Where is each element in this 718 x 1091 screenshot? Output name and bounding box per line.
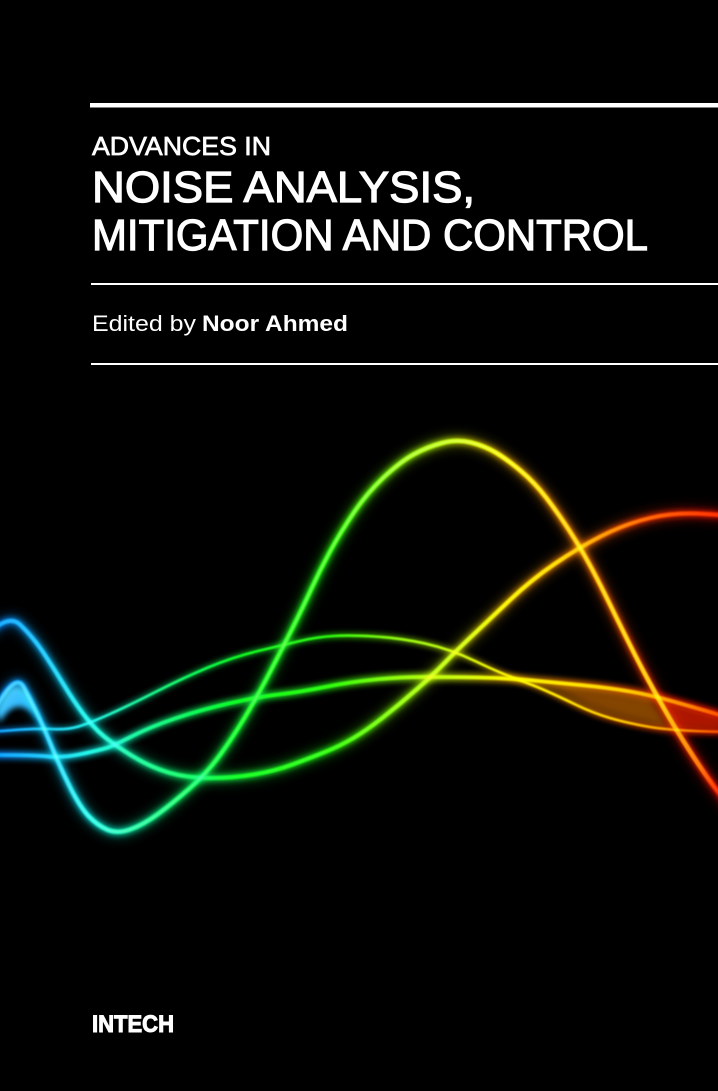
- ambient glow patches: [540, 683, 718, 732]
- rule under title: [91, 283, 718, 285]
- thick top rule: [90, 103, 718, 108]
- blue hump at left edge: [0, 686, 46, 730]
- rule under editor: [91, 363, 718, 365]
- title line two: MITIGATION AND CONTROL: [92, 211, 648, 260]
- edited by: Edited by: [92, 311, 196, 336]
- title line one: NOISE ANALYSIS,: [92, 163, 475, 212]
- editor credit: [92, 311, 348, 336]
- wave: wide lower curve rising to red: [0, 514, 718, 778]
- series line: ADVANCES IN: [92, 131, 271, 161]
- wave: flat middle curve: [0, 677, 718, 757]
- editor name: Noor Ahmed: [202, 311, 348, 336]
- title block: [92, 131, 648, 260]
- wave: thin upper curve: [0, 636, 718, 732]
- wave: tall peak curve: [0, 441, 718, 832]
- publisher logo: INTECH: [92, 1011, 174, 1038]
- light waves artwork: [0, 441, 718, 832]
